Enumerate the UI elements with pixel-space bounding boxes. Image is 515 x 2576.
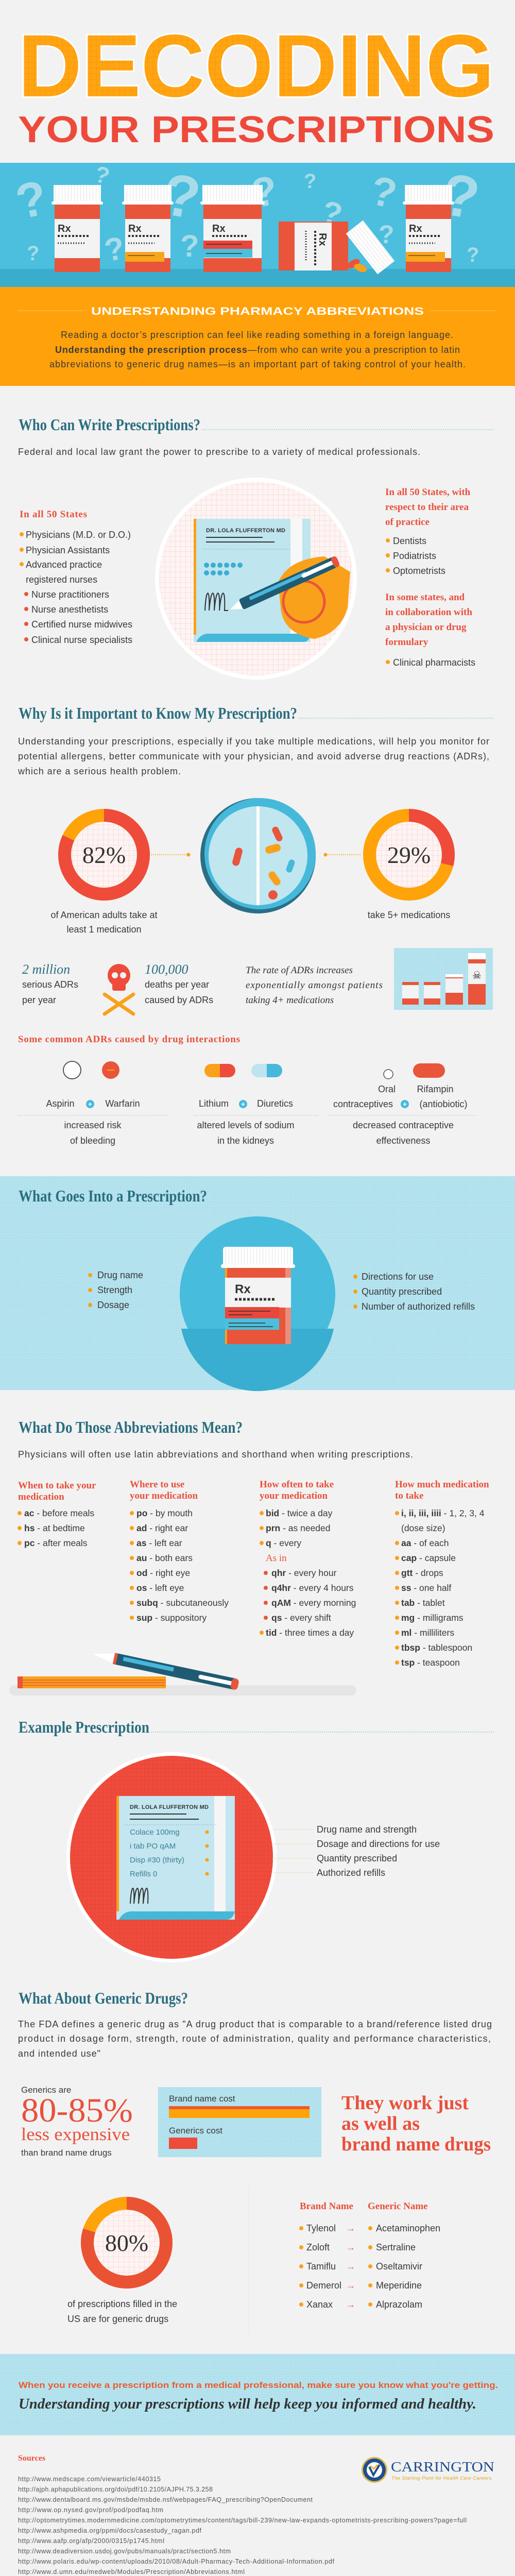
column: how much: mg - milligrams <box>401 1613 464 1623</box>
column: how often: q - every <box>266 1538 301 1548</box>
illustration: example prescription: Colace 100mg <box>130 1828 180 1837</box>
callouts: prescription parts <box>272 1824 440 1878</box>
list: prescription contents left: Drug name <box>97 1270 143 1280</box>
callouts: prescription parts: Dosage and directions for use <box>317 1839 440 1849</box>
banner: pill bottles: ? <box>467 244 479 266</box>
column: how often: prn - as needed <box>266 1523 331 1533</box>
column: where to use <box>130 1479 229 1623</box>
interaction: contraceptives + rifampin <box>329 1063 476 1146</box>
column: how often: tid - three times a day <box>266 1628 354 1638</box>
column: how often: How often to take <box>260 1479 334 1490</box>
text: ADR rate <box>246 965 383 1006</box>
banner: pill bottles: ? <box>11 170 52 230</box>
callouts: prescription parts: Quantity prescribed <box>317 1853 397 1863</box>
banner: pill bottles: ? <box>158 161 205 232</box>
list: other prescribers: Dentists <box>393 536 426 546</box>
column: where to use: as - left ear <box>136 1538 182 1548</box>
intro panel: Reading a doctor’s prescription can feel like reading something in a foreign language. <box>61 330 453 340</box>
list: all 50 states: Nurse anesthetists <box>31 604 108 615</box>
sources: http://www.deadiversion.usdoj.gov/pubs/manuals/pract/section5.htm <box>18 2548 231 2555</box>
banner: pill bottles: ? <box>318 194 346 233</box>
heading: generic drugs: What About Generic Drugs? <box>19 1989 188 2007</box>
table: brand vs generic names: → <box>346 2280 355 2291</box>
chart: 80% donut <box>67 2203 177 2324</box>
table: brand vs generic names: Alprazolam <box>376 2299 422 2310</box>
column: where to use: subq - subcutaneously <box>136 1598 229 1608</box>
stat: 80-85% less expensive: Generics are <box>21 2085 71 2095</box>
column: how often: q4hr - every 4 hours <box>271 1583 354 1593</box>
banner: pill bottles: ? <box>248 167 281 216</box>
list: prescription contents left: Strength <box>97 1285 132 1295</box>
interaction: lithium + diuretics: Lithium <box>199 1098 229 1109</box>
column: how much <box>395 1479 489 1668</box>
column: how much: tbsp - tablespoon <box>401 1642 472 1653</box>
stat: 100,000: caused by ADRs <box>145 995 213 1005</box>
heading: why important: Why Is it Important to Know My Prescription? <box>19 704 297 722</box>
column: how much: tab - tablet <box>401 1598 445 1608</box>
heading: example prescription: Example Prescription <box>19 1718 149 1736</box>
chart: 80% donut: 80% <box>105 2230 148 2256</box>
stat: 80-85% less expensive: 80-85% <box>21 2092 133 2129</box>
sources: http://www.medscape.com/viewarticle/440315 <box>18 2476 161 2483</box>
column: how much: cap - capsule <box>401 1553 456 1563</box>
sources: http://www.dentalboard.ms.gov/msbde/msbde.nsf/webpages/FAQ_prescribing?OpenDocument <box>18 2496 313 2503</box>
stat: 100,000: deaths per year <box>145 979 209 990</box>
chart: cost bars: Generics cost <box>169 2126 222 2136</box>
column: how much: ss - one half <box>401 1583 451 1593</box>
list: all 50 states: Nurse practitioners <box>31 589 109 600</box>
table: brand vs generic names: Brand Name <box>300 2201 353 2212</box>
list: all 50 states: Certified nurse midwives <box>31 619 132 630</box>
callout: they work just as well: as well as <box>341 2113 420 2134</box>
table: brand vs generic names: Meperidine <box>376 2280 422 2291</box>
table: brand vs generic names: → <box>346 2242 355 2252</box>
column: where to use: os - left eye <box>136 1583 184 1593</box>
interaction: contraceptives + rifampin: (antiobiotic) <box>419 1099 468 1109</box>
intro panel <box>0 287 515 386</box>
column: where to use: ad - right ear <box>136 1523 188 1533</box>
interaction: contraceptives + rifampin: Rifampin <box>417 1084 454 1094</box>
text: abbreviations intro: Physicians will often use latin abbreviations and shorthand when writing prescriptions. <box>18 1449 413 1460</box>
icon: rx bottle: Rx <box>235 1282 251 1296</box>
interaction: contraceptives + rifampin: + <box>403 1100 407 1108</box>
icon: pill plate <box>200 798 316 913</box>
list: all 50 states <box>20 509 132 645</box>
column: when to take: medication <box>18 1492 64 1502</box>
column: how much: ml - milliliters <box>401 1628 454 1638</box>
table: brand vs generic names: Zoloft <box>306 2242 330 2252</box>
intro panel: abbreviations to generic drug names—is an important part of taking control of your health. <box>49 359 466 369</box>
icon: skull <box>105 964 133 1014</box>
list: all 50 states: In all 50 States <box>20 509 87 520</box>
bottle 2 <box>122 185 174 272</box>
table: brand vs generic names: → <box>346 2223 355 2233</box>
chart: 82% donut: of American adults take at <box>50 910 158 920</box>
list: other prescribers: In some states, and <box>385 592 465 603</box>
subheading: common ADRs: Some common ADRs caused by drug interactions <box>18 1034 240 1045</box>
sources: http://ajph.aphapublications.org/doi/pdf/10.2105/AJPH.75.3.258 <box>18 2486 213 2493</box>
list: prescription contents right <box>353 1272 475 1312</box>
column: how much: (dose size) <box>401 1523 445 1533</box>
table: brand vs generic names: Xanax <box>306 2299 333 2310</box>
chart: cost bars <box>158 2087 321 2157</box>
footer callout <box>0 2354 515 2435</box>
illustration: example prescription: Disp #30 (thirty) <box>130 1856 184 1865</box>
heading: what goes into: What Goes Into a Prescription? <box>19 1187 207 1205</box>
table: brand vs generic names: Acetaminophen <box>376 2223 440 2233</box>
interaction: aspirin + warfarin: Aspirin <box>46 1098 75 1109</box>
column: how much: to take <box>395 1490 423 1501</box>
list: prescription contents left <box>88 1270 143 1310</box>
column: how much: How much medication <box>395 1479 489 1490</box>
interaction: lithium + diuretics: in the kidneys <box>217 1136 274 1146</box>
chart: 82% donut: least 1 medication <box>66 924 142 935</box>
column: how often: qAM - every morning <box>271 1598 356 1608</box>
bottle 5: Rx <box>409 223 422 234</box>
column: how much: aa - of each <box>401 1538 449 1548</box>
column: where to use: po - by mouth <box>136 1508 193 1518</box>
stat: 80-85% less expensive: less expensive <box>21 2124 130 2144</box>
icon: bottles box: ☠ <box>472 970 482 981</box>
stat: 80-85% less expensive: than brand name drugs <box>21 2148 112 2158</box>
column: how often: your medication <box>260 1490 328 1501</box>
illustration: example prescription <box>66 1752 277 1962</box>
list: other prescribers <box>385 487 475 668</box>
table: brand vs generic names: Tamiflu <box>306 2261 336 2272</box>
sources: http://www.aafp.org/afp/2000/0315/p1745.html <box>18 2537 164 2545</box>
callout: they work just as well <box>341 2092 491 2155</box>
column: how much: gtt - drops <box>401 1568 443 1578</box>
chart: 29% donut: 29% <box>387 842 431 868</box>
bottle 3: Rx <box>212 223 226 234</box>
text: why paragraph: potential allergens, better communicate with your physician, and avoid adverse drug reactions (ADRs), <box>18 751 489 761</box>
banner: pill bottles: ? <box>92 160 112 190</box>
bottle 4 lying: Rx <box>317 233 328 246</box>
chart: 82% donut <box>50 815 191 935</box>
banner: pill bottles: ? <box>367 167 401 217</box>
list: other prescribers: of practice <box>385 517 430 528</box>
list: prescription contents right: Directions for use <box>362 1272 434 1282</box>
column: when to take <box>18 1480 96 1548</box>
table: brand vs generic names: Demerol <box>306 2280 341 2291</box>
list: other prescribers: In all 50 States, with <box>385 487 471 498</box>
bottle 1 <box>52 185 103 272</box>
column: how often <box>260 1479 356 1638</box>
chart: 80% donut: US are for generic drugs <box>67 2314 168 2324</box>
list: other prescribers: a physician or drug <box>385 622 467 633</box>
text: why paragraph: which are a serious health problem. <box>18 766 181 776</box>
banner: pill bottles: ? <box>180 229 199 263</box>
sources: http://optometrytimes.modernmedicine.com/optometrytimes/content/tags/bill-239/new-law-expands-optometrists-prescribing-powers?page=full <box>18 2517 467 2524</box>
illustration: example prescription: DR. LOLA FLUFFERTON MD <box>130 1804 209 1810</box>
list: all 50 states: Advanced practice <box>26 560 102 570</box>
icon: rx bottle <box>180 1216 335 1391</box>
interaction: aspirin + warfarin: of bleeding <box>70 1136 115 1146</box>
bottle 2: Rx <box>128 223 142 234</box>
column: how often: bid - twice a day <box>266 1508 333 1518</box>
column: where to use: your medication <box>130 1490 198 1501</box>
list: all 50 states: Physicians (M.D. or D.O.) <box>26 530 131 540</box>
text: ADR rate: taking 4+ medications <box>246 995 334 1006</box>
column: when to take: pc - after meals <box>24 1538 88 1548</box>
column: when to take: hs - at bedtime <box>24 1523 85 1533</box>
column: how much: i, ii, iii, iiii - 1, 2, 3, 4 <box>401 1508 485 1518</box>
list: all 50 states: Physician Assistants <box>26 545 110 555</box>
chart: cost bars: Brand name cost <box>169 2094 235 2104</box>
column: where to use: Where to use <box>130 1479 184 1490</box>
title: DECODING <box>18 16 494 115</box>
interaction: aspirin + warfarin <box>18 1061 167 1146</box>
banner: pill bottles: ? <box>437 161 484 232</box>
interaction: lithium + diuretics: Diuretics <box>257 1098 293 1109</box>
illustration: prescription pad and pen: DR. LOLA FLUFFERTON MD <box>206 528 285 534</box>
column: when to take: ac - before meals <box>24 1508 94 1518</box>
illustration: example prescription: Refills 0 <box>130 1870 157 1878</box>
column: where to use: sup - suppository <box>136 1613 207 1623</box>
callout: they work just as well: They work just <box>341 2092 469 2114</box>
interaction: contraceptives + rifampin: decreased contraceptive <box>353 1120 454 1130</box>
list: other prescribers: Optometrists <box>393 566 445 576</box>
sources: Sources <box>18 2454 45 2463</box>
interaction: lithium + diuretics <box>194 1064 319 1146</box>
callouts: prescription parts: Authorized refills <box>317 1868 385 1878</box>
icon: bottles box <box>394 948 493 1010</box>
column: how often: qs - every shift <box>271 1613 331 1623</box>
text: why paragraph: Understanding your prescriptions, especially if you take multiple medications, will help you monitor for <box>18 736 489 747</box>
banner: pill bottles <box>0 160 515 287</box>
panel: what goes into a prescription <box>0 1176 515 1391</box>
list: other prescribers: Podiatrists <box>393 551 436 561</box>
table: brand vs generic names <box>299 2201 440 2310</box>
interaction: aspirin + warfarin: + <box>88 1100 92 1108</box>
stat: 80-85% less expensive <box>21 2085 133 2158</box>
interaction: contraceptives + rifampin: contraceptives <box>333 1099 393 1109</box>
table: brand vs generic names: → <box>346 2261 355 2272</box>
sources: http://www.polaris.edu/wp-content/uploads/2010/08/Adult-Pharmacy-Tech-Additional-Information.pdf <box>18 2558 335 2565</box>
interaction: contraceptives + rifampin: Oral <box>378 1084 396 1094</box>
stat: 2 million: per year <box>22 995 56 1005</box>
chart: 82% donut: 82% <box>82 842 126 868</box>
list: other prescribers: in collaboration with <box>385 607 472 618</box>
banner: pill bottles: ? <box>102 230 127 268</box>
column: when to take: When to take your <box>18 1480 96 1491</box>
stat: 100,000 <box>145 962 213 1005</box>
heading: abbreviations: What Do Those Abbreviations Mean? <box>19 1418 243 1436</box>
intro panel: UNDERSTANDING PHARMACY ABBREVIATIONS <box>91 306 424 317</box>
list: other prescribers: Clinical pharmacists <box>393 657 475 668</box>
stat: 2 million: serious ADRs <box>22 979 78 990</box>
bottle 1: Rx <box>58 223 71 234</box>
table: brand vs generic names: Oseltamivir <box>376 2261 422 2272</box>
interaction: aspirin + warfarin: Warfarin <box>105 1098 140 1109</box>
bottle 3 <box>200 185 265 272</box>
text: federal: Federal and local law grant the power to prescribe to a variety of medical professionals. <box>18 447 420 457</box>
sources <box>18 2454 467 2576</box>
banner: pill bottles: ? <box>379 220 394 249</box>
icon: pencil and pen <box>9 1648 356 1696</box>
title: YOUR PRESCRIPTIONS <box>18 109 494 150</box>
column: where to use: od - right eye <box>136 1568 190 1578</box>
column: how much: tsp - teaspoon <box>401 1657 460 1668</box>
list: all 50 states: registered nurses <box>26 574 97 585</box>
stat: 2 million <box>22 962 78 1005</box>
banner: pill bottles: ? <box>304 170 316 193</box>
chart: 29% donut: take 5+ medications <box>368 910 450 920</box>
column: how often: qhr - every hour <box>271 1568 337 1578</box>
callouts: prescription parts: Drug name and strength <box>317 1824 417 1835</box>
chart: 80% donut: of prescriptions filled in the <box>67 2299 177 2309</box>
table: brand vs generic names: Sertraline <box>376 2242 416 2252</box>
sources: http://www.ashpmedia.org/ppmi/docs/casestudy_ragan.pdf <box>18 2527 202 2534</box>
chart: 29% donut <box>323 815 450 920</box>
interaction: lithium + diuretics: + <box>241 1100 245 1108</box>
bottle 5 <box>403 185 454 272</box>
text: why paragraph <box>18 736 489 776</box>
text: FDA definition: The FDA defines a generic drug as "A drug product that is comparable to a brand/reference listed drug <box>18 2019 492 2029</box>
text: FDA definition: product in dosage form, strength, route of administration, quality and performance characteristics, <box>18 2033 491 2044</box>
table: brand vs generic names: Generic Name <box>368 2201 428 2212</box>
list: other prescribers: respect to their area <box>385 502 469 513</box>
heading: who can write: Who Can Write Prescriptions? <box>19 415 200 434</box>
logo: Carrington: CARRINGTON <box>391 2459 494 2475</box>
list: all 50 states: Clinical nurse specialists <box>31 635 132 645</box>
callout: they work just as well: brand name drugs <box>341 2133 491 2155</box>
banner: pill bottles: ? <box>27 242 39 265</box>
illustration: example prescription: i tab PO qAM <box>130 1842 176 1851</box>
list: other prescribers: formulary <box>385 637 428 648</box>
text: FDA definition: and intended use" <box>18 2048 100 2059</box>
illustration: prescription pad and pen <box>155 478 357 680</box>
column: how often: As in <box>266 1553 287 1564</box>
bottle 4 lying <box>279 221 394 274</box>
logo: Carrington: The Starting Point for Health Care Careers. <box>391 2476 493 2481</box>
sources: http://www.d.umn.edu/medweb/Modules/Prescription/Abbreviations.html <box>18 2568 245 2575</box>
sources: http://www.op.nysed.gov/prof/pod/podfaq.htm <box>18 2506 163 2514</box>
intro panel: Understanding the prescription process—from who can write you a prescription to latin <box>55 345 460 355</box>
interaction: lithium + diuretics: altered levels of sodium <box>197 1120 295 1130</box>
interaction: aspirin + warfarin: increased risk <box>64 1120 122 1130</box>
interaction: contraceptives + rifampin: effectiveness <box>376 1136 430 1146</box>
stat: 100,000: 100,000 <box>145 962 188 977</box>
list: prescription contents right: Number of authorized refills <box>362 1301 475 1312</box>
footer callout: Understanding your prescriptions will help keep you informed and healthy. <box>19 2396 476 2412</box>
logo: Carrington <box>362 2457 494 2483</box>
text: ADR rate: exponentially amongst patients <box>246 980 383 991</box>
table: brand vs generic names: → <box>346 2299 355 2310</box>
stat: 2 million: 2 million <box>22 962 70 977</box>
table: brand vs generic names: Tylenol <box>306 2223 336 2233</box>
column: where to use: au - both ears <box>136 1553 193 1563</box>
text: FDA definition <box>18 2019 492 2059</box>
text: ADR rate: The rate of ADRs increases <box>246 965 353 976</box>
list: prescription contents right: Quantity prescribed <box>362 1286 442 1297</box>
footer callout: When you receive a prescription from a medical professional, make sure you know what you're getting. <box>19 2380 498 2390</box>
list: prescription contents left: Dosage <box>97 1300 129 1310</box>
